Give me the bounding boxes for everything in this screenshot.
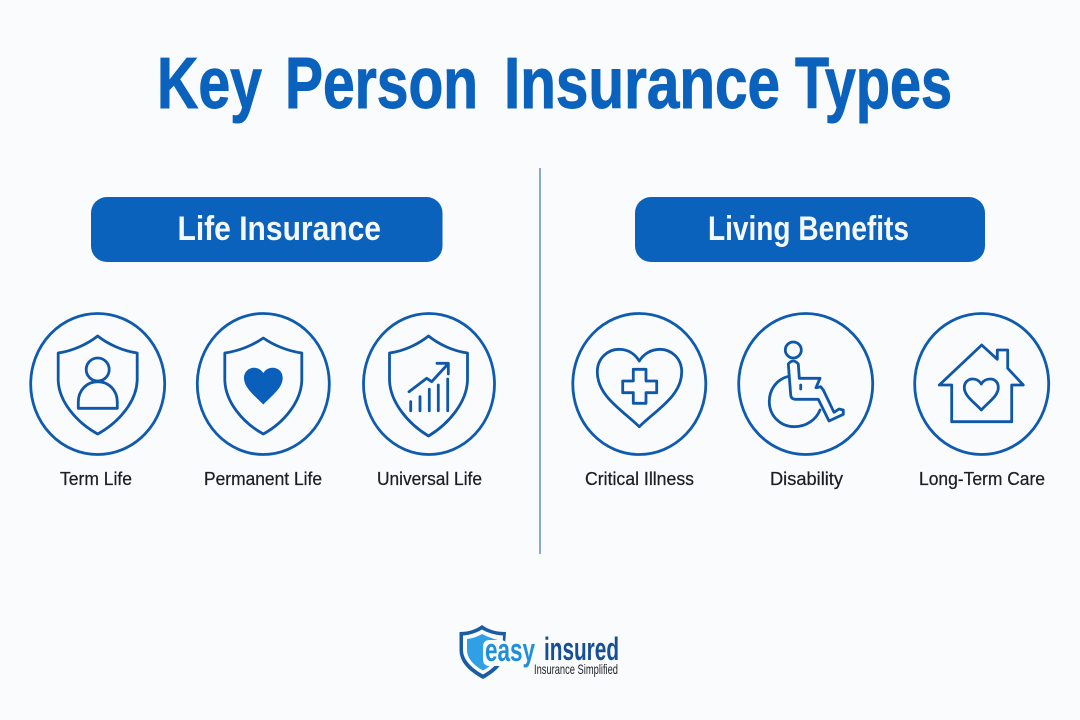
title: Key (157, 44, 262, 124)
title: Types (795, 44, 952, 124)
panel: living benefits (573, 197, 1049, 489)
title: Person (285, 44, 478, 124)
icon: long-term care house with heart (915, 314, 1049, 454)
icon: disability wheelchair (739, 314, 873, 454)
icon: permanent life shield with heart (197, 314, 329, 454)
logo: easy insured (460, 625, 619, 679)
heading: living benefits: Living Benefits (708, 210, 909, 248)
heading: life insurance (91, 197, 442, 262)
icon: logo shield (460, 625, 507, 679)
logo wordmark: insured: insured (544, 631, 619, 667)
label: universal life: Universal Life (377, 468, 482, 489)
label: long-term care: Long-Term Care (919, 468, 1045, 489)
icon: critical illness heart with cross (573, 314, 706, 454)
logo wordmark: easy: easy (485, 632, 535, 668)
title: Insurance (504, 44, 780, 124)
label: disability: Disability (770, 468, 844, 489)
icon: term life shield with person (31, 314, 165, 454)
label: critical illness: Critical Illness (585, 468, 694, 489)
icon: universal life shield with growth chart (364, 314, 494, 454)
label: term life: Term Life (60, 468, 132, 489)
heading: living benefits (635, 197, 985, 262)
label: permanent life: Permanent Life (204, 468, 322, 489)
heading: life insurance: Life Insurance (178, 210, 381, 248)
title (157, 44, 952, 124)
logo tagline: Insurance Simplified (534, 661, 618, 677)
panel: life insurance (31, 197, 494, 489)
